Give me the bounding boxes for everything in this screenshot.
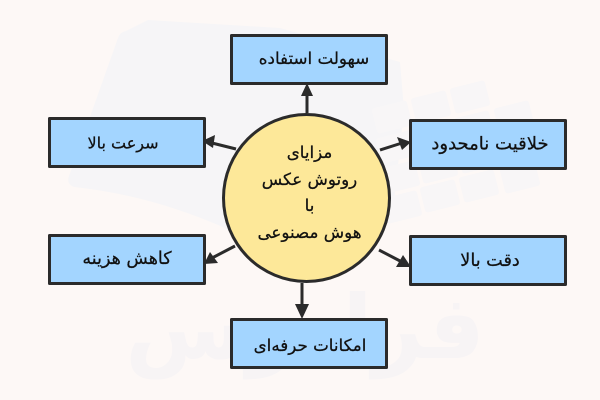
arrow: to top box: [301, 83, 313, 113]
box: high speed: [48, 117, 206, 168]
box: cost reduction: کاهش هزینه: [82, 248, 172, 268]
hub: central topic circle: [222, 113, 391, 283]
hub text: مزایای: [287, 142, 332, 162]
arrow: to upper left box: [202, 135, 236, 149]
box: high accuracy: [409, 235, 567, 286]
box: high accuracy: دقت بالا: [460, 250, 520, 270]
hub text: با: [305, 195, 314, 215]
box: cost reduction: [48, 234, 206, 285]
box: professional features: امکانات حرفه‌ای: [254, 334, 366, 354]
box: high speed: سرعت بالا: [87, 133, 159, 152]
arrow: to lower left box: [204, 246, 235, 264]
box: unlimited creativity: [409, 119, 567, 170]
hub text: هوش مصنوعی: [257, 222, 362, 242]
hub text: [257, 142, 362, 242]
box: ease of use: [230, 34, 388, 85]
arrow: to bottom box: [295, 283, 309, 319]
box: ease of use: سهولت استفاده: [259, 48, 369, 68]
box: unlimited creativity: خلاقیت نامحدود: [431, 133, 549, 154]
box: professional features: [230, 318, 388, 369]
hub text: روتوش عکس: [262, 169, 357, 189]
arrow: to upper right box: [380, 137, 411, 150]
watermark: logo: فرادرس: [125, 276, 485, 379]
arrow: to lower right box: [379, 250, 411, 267]
